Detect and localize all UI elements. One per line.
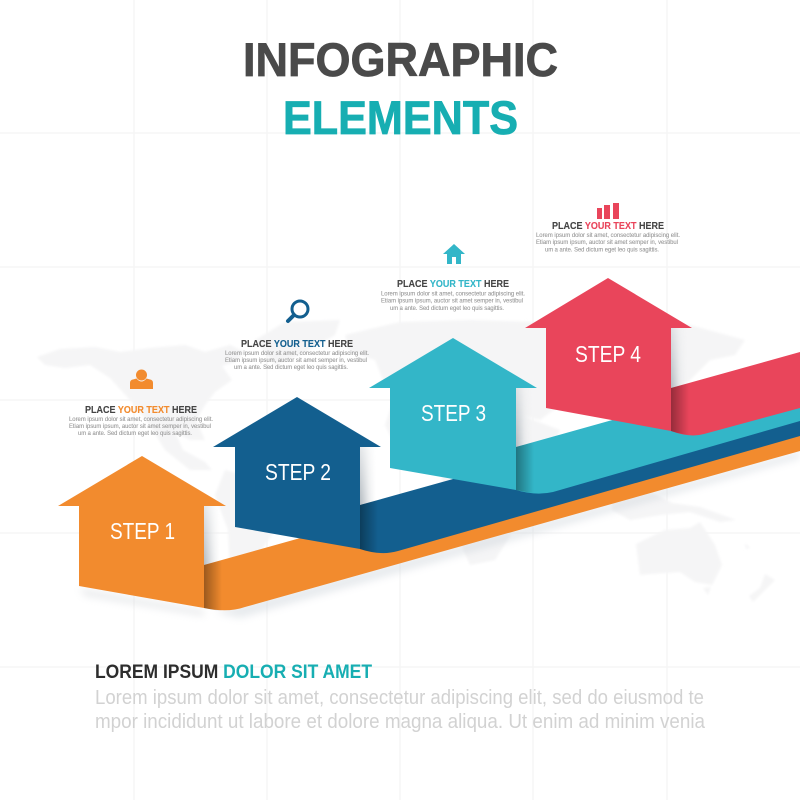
text block: step 2: Lorem ipsum dolor sit amet, consectetur adipiscing elit. (225, 350, 369, 357)
text block: step 4: um a ante. Sed dictum eget leo quis sagittis. (545, 246, 659, 254)
side shadow: step 4 (671, 328, 682, 388)
ribbon: orange (204, 398, 800, 610)
arrow: step 1: STEP 1 (110, 518, 175, 544)
text block: step 3: Lorem ipsum dolor sit amet, consectetur adipiscing elit. (381, 290, 525, 298)
bottom body text: mpor incididunt ut labore et dolore magna aliqua. Ut enim ad minim venia (95, 711, 706, 733)
text block: step 2: um a ante. Sed dictum eget leo quis sagittis. (234, 364, 348, 371)
arrow: step 2 (213, 397, 381, 549)
title: ELEMENTS (283, 92, 518, 145)
fold shadow: orange (204, 560, 222, 611)
side shadow: step 3 (516, 388, 526, 447)
text block: step 4: PLACE YOUR TEXT HERE (552, 220, 664, 232)
ribbon: blue (360, 382, 800, 553)
text block: step 2 (225, 338, 369, 371)
bottom heading: LOREM IPSUM DOLOR SIT AMET (95, 662, 372, 683)
text block: step 1 (69, 404, 213, 437)
text block: step 4 (536, 220, 680, 254)
arrow: step 3 (369, 338, 537, 490)
arrow: step 4 (525, 278, 692, 431)
text block: step 2: Etiam ipsum ipsum, auctor sit amet semper in, vestibul (225, 357, 367, 364)
text block: step 3 (381, 278, 525, 312)
fold shadow: teal (516, 442, 534, 493)
fold shadow: blue (360, 500, 378, 553)
ribbon: teal (516, 368, 800, 494)
arrow: step 2: STEP 2 (265, 459, 331, 485)
fold shadow: red (671, 383, 689, 435)
text block: step 1: um a ante. Sed dictum eget leo quis sagittis. (78, 430, 192, 437)
arrow: step 4: STEP 4 (575, 341, 641, 367)
arrow: step 1 (58, 456, 226, 608)
title: INFOGRAPHIC (243, 34, 558, 87)
text block: step 1: Lorem ipsum dolor sit amet, consectetur adipiscing elit. (69, 416, 213, 423)
ribbon shadow (215, 451, 800, 618)
icon: magnifier (288, 301, 308, 321)
side shadow: step 1 (204, 506, 217, 565)
text block: step 2: PLACE YOUR TEXT HERE (241, 338, 353, 350)
side shadow: step 2 (360, 447, 373, 505)
text block: step 3: Etiam ipsum ipsum, auctor sit amet semper in, vestibul (381, 298, 523, 304)
text block: step 3: PLACE YOUR TEXT HERE (397, 278, 509, 290)
title (243, 34, 558, 145)
arrow: step 3: STEP 3 (421, 400, 486, 426)
text block: step 4: Lorem ipsum dolor sit amet, consectetur adipiscing elit. (536, 232, 680, 239)
text block: step 1: Etiam ipsum ipsum, auctor sit amet semper in, vestibul (69, 423, 211, 430)
ribbon: red (671, 352, 800, 435)
text block: step 4: Etiam ipsum ipsum, auctor sit amet semper in, vestibul (536, 239, 678, 246)
arrow underside shadow: step 1 (79, 588, 204, 616)
icon: person (130, 370, 153, 389)
bottom body text: Lorem ipsum dolor sit amet, consectetur adipiscing elit, sed do eiusmod te (95, 687, 704, 709)
text block: step 1: PLACE YOUR TEXT HERE (85, 404, 197, 416)
text block: step 3: um a ante. Sed dictum eget leo quis sagittis. (390, 305, 504, 312)
world map (37, 318, 775, 602)
bottom body text (95, 687, 706, 733)
icon: bar chart (597, 203, 619, 219)
icon: house (443, 244, 465, 264)
